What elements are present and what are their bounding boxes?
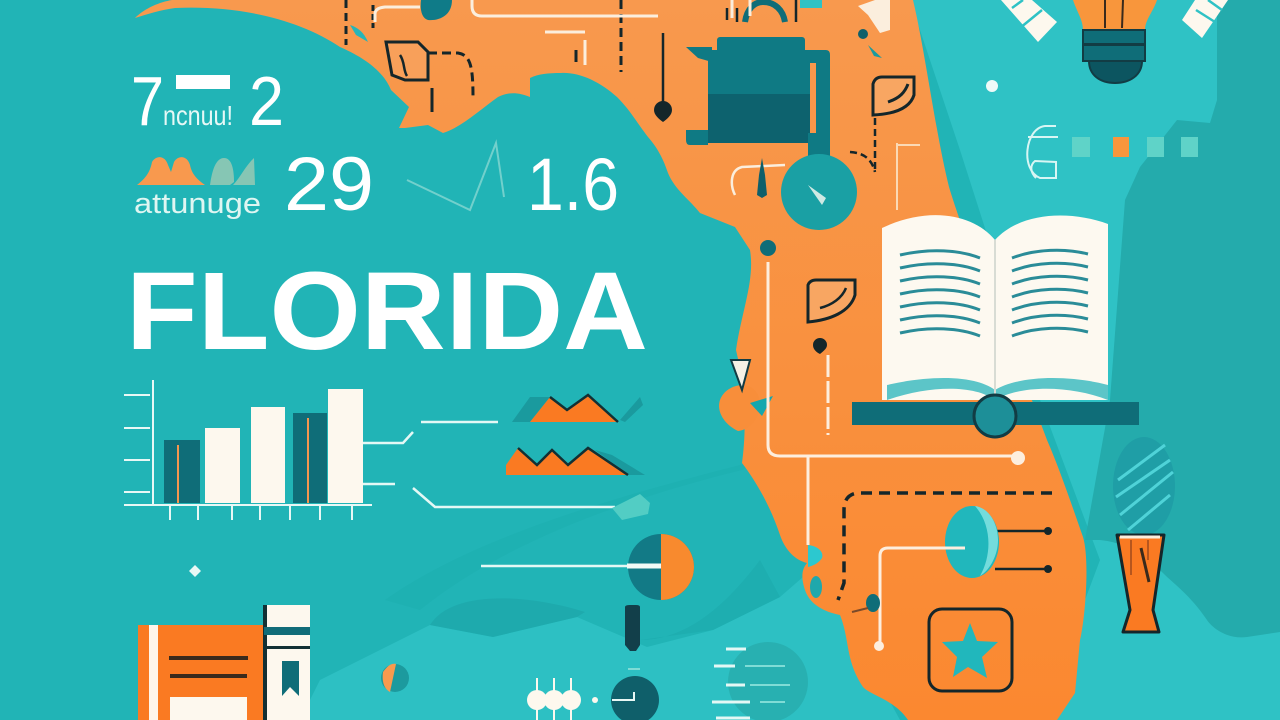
stat row 2 label: attunuge bbox=[134, 188, 261, 220]
small marker bbox=[813, 338, 827, 354]
coast blobs bbox=[808, 545, 822, 598]
stat row 1: 7 bbox=[131, 62, 164, 140]
icon: leaf tag middle bbox=[808, 280, 855, 322]
dashed frame bbox=[838, 493, 1052, 600]
icon: gauge circle bbox=[781, 154, 857, 230]
white smudge top bbox=[858, 0, 890, 58]
diamond bbox=[189, 565, 201, 577]
marker stem bbox=[757, 158, 767, 198]
dashed white stem bbox=[826, 355, 830, 435]
icon: open book bbox=[852, 215, 1139, 437]
tree markers bbox=[527, 678, 598, 720]
icon: dot with stem bbox=[760, 240, 1025, 545]
island: Tampa bay marker bbox=[719, 360, 773, 431]
mountain icon 1 bbox=[512, 395, 643, 422]
pie icon bbox=[627, 534, 694, 600]
pin and dot bbox=[611, 605, 659, 720]
stat: 29: 29 bbox=[284, 142, 374, 227]
title: FLORIDA bbox=[126, 250, 648, 373]
thin white route bbox=[897, 143, 920, 210]
small pie bbox=[381, 664, 409, 692]
pin drop bbox=[654, 101, 672, 122]
white lines top bbox=[375, 0, 658, 65]
stat row 1: ncnuu! bbox=[163, 100, 233, 131]
icon: star badge bbox=[929, 609, 1012, 691]
icon: light bulb bbox=[1001, 0, 1228, 83]
teal smudge bbox=[612, 494, 650, 520]
icon: half circle bbox=[874, 506, 1052, 651]
stat: 1.6: 1.6 bbox=[527, 143, 619, 226]
map: Florida bbox=[135, 0, 1086, 720]
icon: machine bbox=[686, 37, 830, 158]
arch icon bbox=[727, 0, 822, 22]
bar chart bbox=[124, 380, 372, 520]
icon: brush / torch bbox=[1113, 437, 1175, 632]
icon: leaf tag top bbox=[873, 77, 914, 115]
line chart small bbox=[407, 143, 504, 210]
stat row 1 bbox=[131, 62, 284, 140]
icon: key row bbox=[1027, 126, 1198, 178]
leaf box 1 bbox=[386, 42, 428, 80]
teal small coast mark bbox=[350, 25, 368, 42]
top map details bbox=[346, 0, 663, 112]
mountain icon 2 bbox=[506, 448, 645, 475]
connector lines bbox=[363, 422, 627, 566]
small pin bbox=[852, 594, 880, 612]
dashed route bbox=[850, 118, 875, 172]
stat row 2 label bbox=[134, 157, 261, 220]
globe lines bbox=[712, 642, 808, 720]
book stack icon bbox=[138, 605, 310, 720]
stat row 1: 2 bbox=[249, 62, 284, 140]
white bracket by gauge bbox=[732, 165, 785, 195]
teal drop top bbox=[421, 0, 452, 20]
dot right bbox=[986, 80, 998, 92]
